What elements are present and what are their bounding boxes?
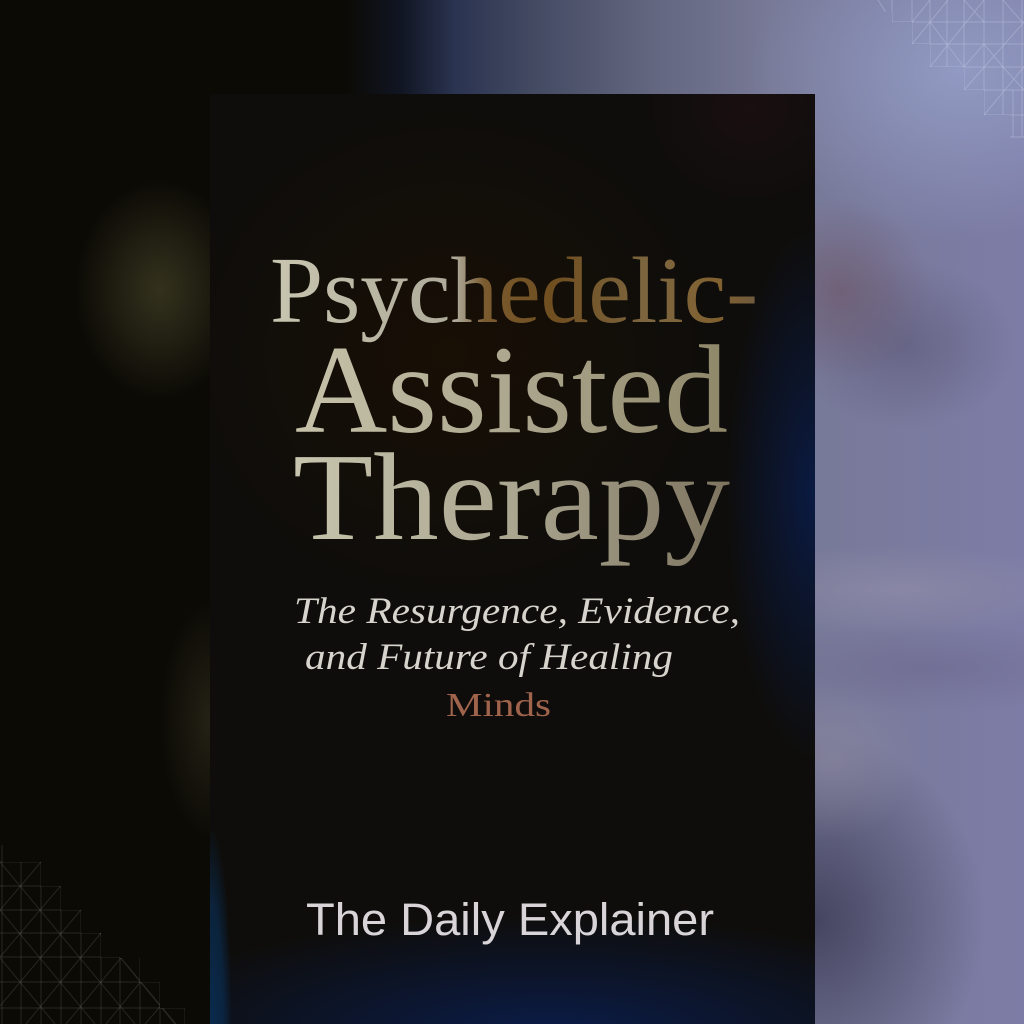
brand name: The Daily Explainer (306, 894, 714, 945)
title line 3: Therapy (293, 429, 731, 567)
pattern: top right geometric grid (878, 0, 1024, 138)
title line 2: Assisted (295, 321, 728, 460)
pattern: bottom left geometric grid (0, 845, 185, 1024)
panel: dark cover (210, 94, 815, 1024)
title line 1: Psychedelic- (270, 239, 758, 343)
subtitle (294, 591, 740, 724)
subtitle line 2: and Future of Healing (305, 637, 673, 678)
subtitle line 1: The Resurgence, Evidence, (294, 591, 740, 632)
subtitle line 3: Minds (446, 687, 551, 724)
title (270, 239, 758, 567)
